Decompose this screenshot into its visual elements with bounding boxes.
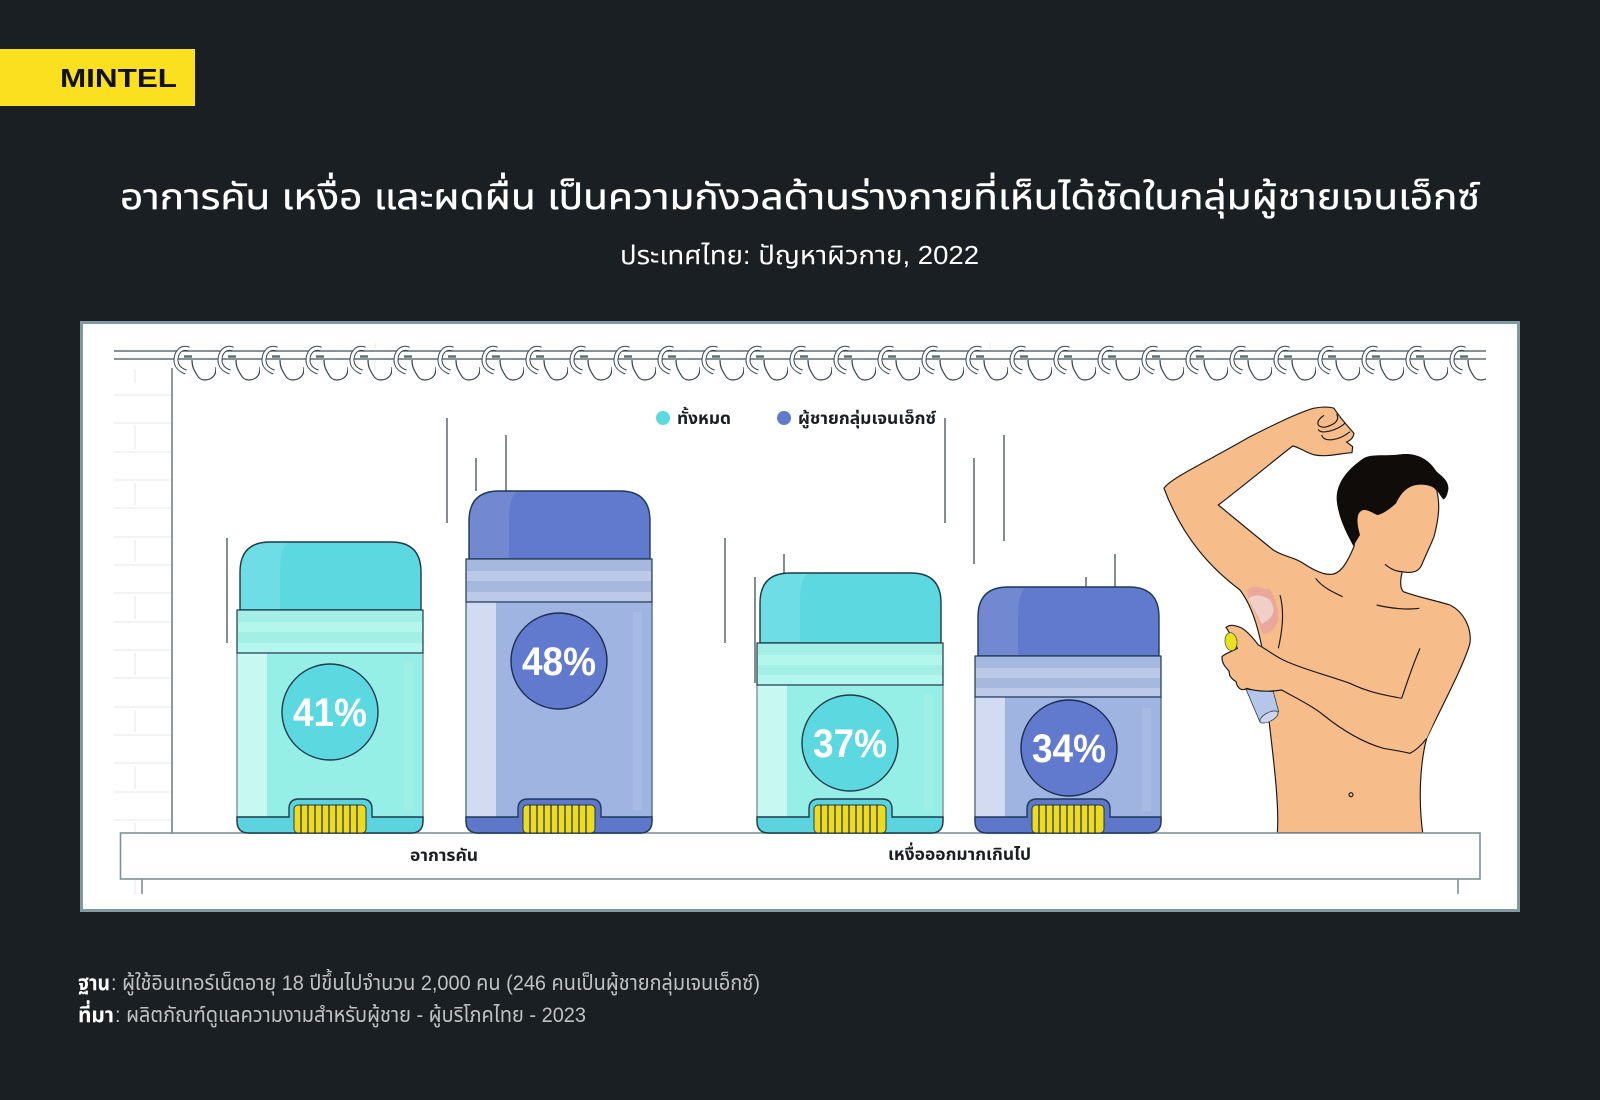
value circle bbox=[282, 664, 378, 760]
base bbox=[237, 799, 423, 833]
cap bbox=[760, 573, 941, 643]
rash on underarm bbox=[1248, 587, 1278, 634]
counter shelf bbox=[120, 833, 1480, 894]
wall tiles bbox=[114, 343, 1145, 894]
base bbox=[466, 799, 652, 833]
label: itching: อาการคัน bbox=[410, 846, 478, 865]
hair bbox=[1337, 454, 1448, 546]
cap bbox=[469, 491, 650, 559]
yellow dial bbox=[1032, 805, 1104, 833]
title: อาการคัน เหงื่อ และผดผื่น เป็นความกังวลด้านร่างกายที่เห็นได้ชัดในกลุ่มผู้ชายเจนเอ็กซ์ bbox=[120, 172, 1481, 218]
legend item: total bbox=[656, 407, 731, 428]
body bbox=[975, 697, 1161, 823]
value circle bbox=[511, 613, 607, 709]
body bbox=[757, 685, 943, 823]
yellow dial bbox=[814, 805, 886, 833]
stick chart: sweating total 37% bbox=[757, 573, 943, 833]
curtain rings and scallops bbox=[172, 340, 1486, 388]
base bbox=[757, 799, 943, 833]
legend bbox=[656, 407, 936, 429]
band bbox=[466, 559, 652, 602]
cap bbox=[240, 542, 421, 610]
stick chart: sweating Gen X men 34% bbox=[975, 587, 1161, 833]
forearm and hand bbox=[1222, 625, 1463, 753]
label: excessive sweating: เหงื่อออกมากเกินไป bbox=[888, 842, 1031, 864]
band bbox=[757, 643, 943, 685]
man figure applying deodorant bbox=[1164, 407, 1470, 833]
legend item: Gen X men: ผู้ชายกลุ่มเจนเอ็กซ์ bbox=[798, 408, 936, 429]
yellow dial bbox=[294, 805, 366, 833]
spray nozzle cap bbox=[1224, 632, 1238, 651]
footnote: source: : ผลิตภัณฑ์ดูแลความงามสำหรับผู้ชาย - ผู้บริโภคไทย - 2023 bbox=[115, 1003, 586, 1028]
band bbox=[975, 656, 1161, 697]
value circle: 41% bbox=[293, 691, 367, 735]
legend item: total: ทั้งหมด bbox=[677, 407, 731, 428]
footnote: source: ที่มา bbox=[78, 1000, 114, 1027]
band bbox=[237, 610, 423, 653]
body contour lines bbox=[1222, 414, 1427, 797]
curtain rod bbox=[114, 351, 1486, 359]
cap bbox=[978, 587, 1159, 656]
yellow dial bbox=[523, 805, 595, 833]
deodorant spray can bbox=[1246, 689, 1280, 726]
body bbox=[237, 653, 423, 823]
logo: Mintel bbox=[0, 49, 195, 106]
value circle bbox=[802, 695, 898, 791]
value circle bbox=[1021, 700, 1117, 796]
curtain edge bbox=[171, 368, 173, 833]
value circle: 48% bbox=[522, 640, 596, 684]
footnote: base: : ผู้ใช้อินเทอร์เน็ตอายุ 18 ปีขึ้นไปจำนวน 2,000 คน (246 คนเป็นผู้ชายกลุ่มเจนเอ็กซ์) bbox=[111, 968, 760, 996]
body bbox=[466, 602, 652, 823]
value circle: 37% bbox=[813, 722, 887, 766]
logo: Mintel: MINTEL bbox=[60, 63, 177, 93]
value circle: 34% bbox=[1032, 727, 1106, 771]
subtitle: ประเทศไทย: ปัญหาผิวกาย, 2022 bbox=[620, 240, 979, 270]
torso and raised arm bbox=[1164, 407, 1470, 833]
stick chart: itching total 41% bbox=[237, 542, 423, 833]
stick chart: itching Gen X men 48% bbox=[466, 491, 652, 833]
panel: bathroom illustration bbox=[82, 322, 1518, 910]
base bbox=[975, 799, 1161, 833]
footnote: base: ฐาน bbox=[78, 972, 110, 995]
falling motion lines bbox=[227, 418, 1115, 683]
